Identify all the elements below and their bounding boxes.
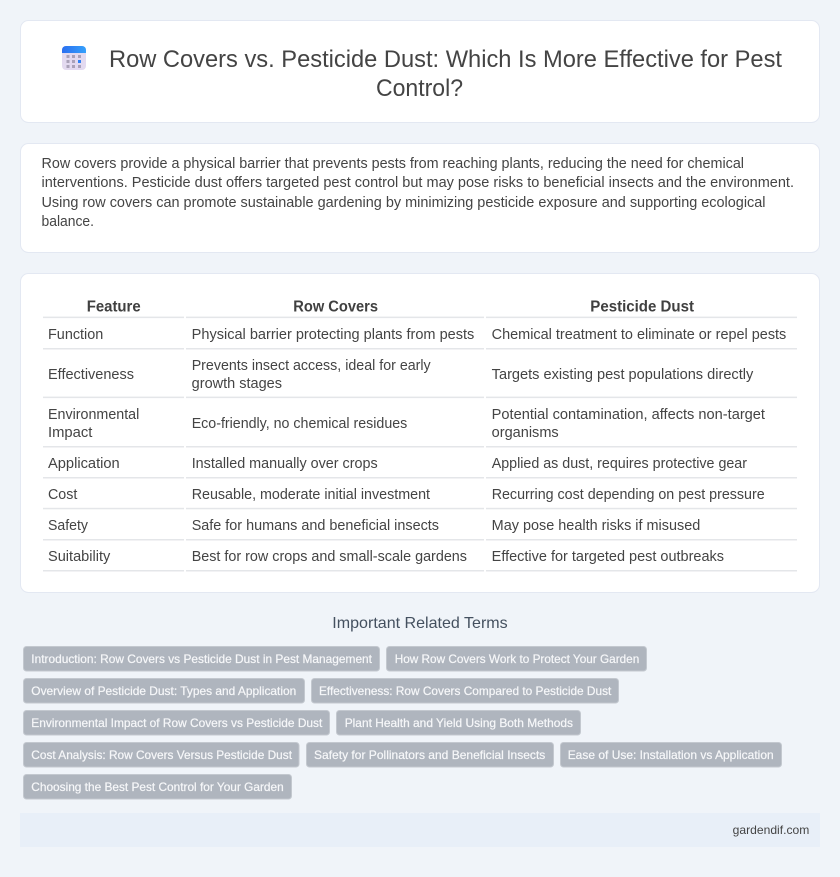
text block: introduction paragraph: interventions. Pesticide dust offers targeted pest control but may pose risks to beneficial insects and the environment. — [42, 175, 794, 191]
row: effectiveness: Effectiveness — [48, 367, 134, 383]
panel: comparison table — [20, 274, 820, 592]
row: suitability — [48, 549, 724, 565]
table header row: Feature — [87, 298, 141, 316]
tag: Plant Health and Yield Using Both Methods — [345, 716, 573, 730]
tag: Introduction: Row Covers vs Pesticide Dust in Pest Management — [31, 652, 373, 666]
tag list: related terms — [24, 646, 782, 799]
tag — [24, 710, 330, 735]
tag — [312, 678, 618, 703]
tag — [306, 742, 554, 767]
table header row: Pesticide Dust — [590, 298, 695, 316]
row: suitability: Best for row crops and small-scale gardens — [192, 549, 467, 565]
row: effectiveness — [48, 358, 754, 392]
row: cost: Cost — [48, 487, 77, 503]
tag — [24, 646, 380, 671]
row: safety: Safe for humans and beneficial insects — [192, 518, 439, 534]
row: environmental impact — [48, 407, 765, 441]
text block: introduction paragraph: balance. — [42, 214, 94, 230]
heading: important related terms: Important Related Terms — [332, 615, 508, 632]
tag: How Row Covers Work to Protect Your Garden — [395, 652, 639, 666]
title: Control? — [376, 75, 463, 102]
row: application — [48, 456, 747, 472]
title — [109, 46, 782, 102]
table header row — [87, 298, 695, 316]
row: environmental impact: Environmental — [48, 407, 139, 423]
row: function — [48, 327, 786, 343]
row: application: Applied as dust, requires protective gear — [492, 456, 747, 472]
row: function: Physical barrier protecting plants from pests — [192, 327, 474, 343]
row: safety: Safety — [48, 518, 89, 534]
panel: introduction — [20, 144, 820, 252]
row: effectiveness: Targets existing pest populations directly — [492, 367, 754, 383]
title: Row Covers vs. Pesticide Dust: Which Is More Effective for Pest — [109, 46, 782, 73]
panel: header — [20, 20, 820, 122]
row: environmental impact: organisms — [492, 425, 559, 441]
text block: introduction paragraph: Using row covers can promote sustainable gardening by minimizing pesticide exposure and supporting ecological — [42, 195, 766, 211]
row: function: Function — [48, 327, 103, 343]
row: environmental impact: Potential contamination, affects non-target — [492, 407, 765, 423]
tag — [336, 710, 580, 735]
row: cost: Recurring cost depending on pest pressure — [492, 487, 765, 503]
tag — [24, 742, 299, 767]
row: cost — [48, 487, 765, 503]
row: suitability: Suitability — [48, 549, 111, 565]
row: effectiveness: growth stages — [192, 376, 282, 392]
row: function: Chemical treatment to eliminate or repel pests — [492, 327, 786, 343]
text block: introduction paragraph — [42, 156, 794, 230]
row: application: Installed manually over crops — [192, 456, 378, 472]
tag: Choosing the Best Pest Control for Your Garden — [31, 780, 284, 794]
table header row: Row Covers — [293, 298, 378, 316]
row: environmental impact: Impact — [48, 425, 92, 441]
row: cost: Reusable, moderate initial investment — [192, 487, 430, 503]
tag: Effectiveness: Row Covers Compared to Pesticide Dust — [319, 684, 612, 698]
row: safety: May pose health risks if misused — [492, 518, 700, 534]
text block: introduction paragraph: Row covers provide a physical barrier that prevents pests from reaching plants, reducing the need for chemical — [42, 156, 744, 172]
icon: calendar — [62, 46, 86, 70]
footer: gardendif.com — [733, 823, 809, 837]
tag — [24, 774, 292, 799]
row: suitability: Effective for targeted pest outbreaks — [492, 549, 724, 565]
tag: Ease of Use: Installation vs Application — [568, 748, 774, 762]
tag — [560, 742, 782, 767]
tag: Safety for Pollinators and Beneficial Insects — [314, 748, 545, 762]
row: application: Application — [48, 456, 120, 472]
row: safety — [48, 518, 700, 534]
tag: Environmental Impact of Row Covers vs Pesticide Dust — [31, 716, 323, 730]
tag: Cost Analysis: Row Covers Versus Pesticide Dust — [31, 748, 293, 762]
tag — [386, 646, 646, 671]
tag: Overview of Pesticide Dust: Types and Application — [31, 684, 296, 698]
row: effectiveness: Prevents insect access, ideal for early — [192, 358, 431, 374]
row: environmental impact: Eco-friendly, no chemical residues — [192, 416, 407, 432]
tag — [24, 678, 304, 703]
footer — [20, 813, 820, 847]
